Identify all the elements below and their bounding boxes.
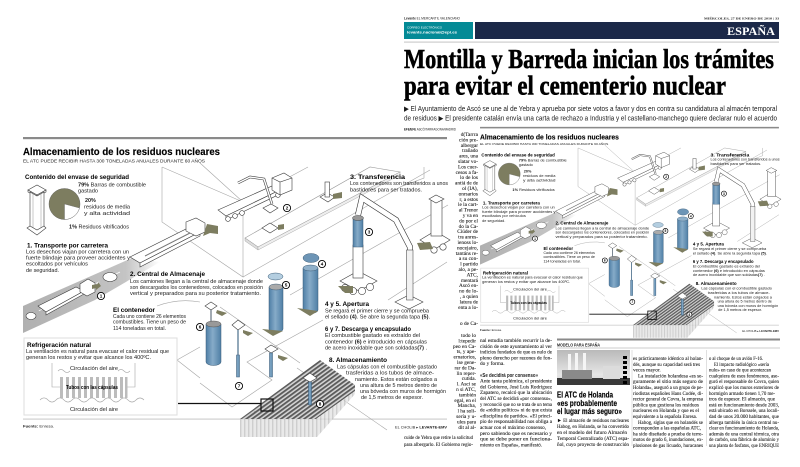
article continuation under left graphic: cuide de Yebra que retire la solicitud [404, 435, 473, 441]
step marker 1 [97, 292, 105, 300]
refrigeration text: Circulación del aire [70, 366, 118, 372]
step 1 text copy: fuerte blindaje para proveer accidentes y [482, 210, 556, 214]
article headline [557, 390, 622, 416]
article continuation under left graphic [404, 435, 473, 448]
markers numbers: 2 [286, 206, 289, 211]
step 6 and 7 text copy [693, 259, 765, 277]
transfer column with blue container [338, 216, 377, 295]
second copy of the infographic drawing, reduced [480, 127, 781, 338]
article column 4: El impacto radiológico «sería [714, 362, 770, 368]
narrow article column fragments: l:tepedir [458, 338, 476, 344]
article column 4: una planta de fosfatos, que ENRIQUE [709, 442, 779, 449]
contents section: Contenido del envase de seguridad [25, 174, 129, 181]
narrow article column fragments: cesos a fa- [456, 169, 478, 176]
narrow article column fragments: alo, a pe- [458, 267, 478, 273]
step 1 text: fuerte blindaje para proveer accidentes y [26, 256, 130, 262]
step 4 and 5 text [325, 301, 430, 320]
container 6 and capsule rods 7 [196, 302, 288, 390]
step marker 6 [196, 323, 204, 331]
narrow article column fragments: do por el [459, 218, 479, 224]
markers numbers: 6 [199, 325, 202, 330]
markers numbers copy: 4 [690, 214, 692, 218]
refrigeration text copy: generan los restos y evitar que alcance los 400ºC. [482, 280, 570, 284]
step 2 text: 2. Central de Almacenaje [130, 271, 205, 278]
container note [113, 307, 186, 332]
article column 3: guramente el sitio más seguro de [633, 379, 704, 385]
markers numbers copy: 1 [534, 237, 536, 241]
article column 3: equivalente a la española Enresa. [633, 414, 697, 420]
byline: EFE/EFE ASCÓ/TARRAGONA/MADRID [404, 126, 456, 132]
contents section: 20% [85, 198, 96, 204]
narrow article column fragments: ts, y ape- [457, 349, 476, 355]
narrow article column fragments: le la cart- [458, 202, 478, 208]
narrow article column fragments: ernatorios, [453, 355, 476, 361]
article column 4: dad de unos 20.000 habitantes, que [709, 414, 780, 420]
narrow article column fragments: onrsarios [459, 191, 478, 197]
step 8 text copy: namiento. Estos están colgados a [714, 295, 773, 299]
refrigeration text: Refrigeración natural [27, 342, 91, 349]
article column 1: pero sabiendo que es necesario y [480, 431, 552, 437]
narrow article column fragments: ATC, [467, 272, 478, 278]
refrigeration panel [24, 338, 177, 415]
step 3 text copy: Los contenedores son transferidos a unos [711, 158, 780, 162]
narrow article column fragments: Los cuer- [458, 164, 478, 170]
article column 3: La instalación holandesa «es se- [638, 373, 703, 379]
contents section: y alta actividad [84, 211, 130, 217]
narrow article column fragments [453, 131, 479, 431]
step 2 text: vertical y preparados para su posterior tratamiento. [130, 291, 261, 297]
article column 4: está ubicado en Borssele, una locali- [709, 408, 779, 414]
header and footer rules [23, 137, 447, 420]
step 2 text copy [555, 221, 649, 239]
infographic drawing: nuclear waste storage [23, 137, 450, 437]
refrigeration text: Circulación del aire [70, 407, 118, 413]
step 1 text: Los desechos viajan por carretera con un [26, 250, 129, 256]
container note: combustibles. Tiene un peso de [113, 320, 186, 326]
article column 1: que se debe poner en funciona- [480, 436, 552, 443]
narrow article column fragments: Ciúder de [457, 229, 479, 235]
refrigeration text [26, 342, 169, 413]
step 3 text copy [711, 152, 780, 166]
step 8 text copy: Las cápsulas con el combustible gastado [701, 287, 772, 291]
trailer and upper storage platform [130, 167, 400, 267]
step 3 text: 3. Transferencia [350, 174, 405, 181]
markers numbers: 8 [319, 402, 322, 407]
left graphic texts [23, 146, 448, 430]
article column 3: corresponden a las españolas ATC, [633, 426, 701, 432]
contents section copy: gastado [519, 163, 533, 167]
refrigeration text copy: Tubos con las cápsulas [510, 301, 547, 305]
narrow article column fragments: trañado [462, 148, 478, 154]
narrow article column fragments: todo lo [461, 333, 476, 339]
contents section copy: 20% [524, 170, 532, 174]
step 6 and 7 text: de acero inoxidable que son soldadas (7) . [325, 346, 427, 352]
article column 1: pleno derecho por razones de fon- [480, 354, 552, 361]
article column 4: alberga también la única central nu- [709, 420, 779, 426]
narrow article column fragments: ción pre- [459, 137, 478, 143]
step 8 text copy: de 1,5 metros de espesor. [718, 308, 762, 312]
column separators [632, 350, 706, 446]
narrow article column fragments: , a quien [460, 294, 478, 300]
step 2 text copy: 2. Central de Almacenaje [555, 221, 609, 226]
step 4 and 5 text: el sellado (4). Se abre la segunda tapa (5). [325, 314, 430, 320]
open containers 4 and 5 [262, 254, 326, 336]
step marker 8 [316, 400, 324, 408]
contents section: gastado [78, 188, 98, 194]
step 4 and 5 text copy [693, 242, 767, 255]
step 8 text: una bóveda con muros de hormigón [360, 389, 446, 395]
step 3 text [350, 174, 448, 194]
narrow article column fragments: también [459, 392, 476, 398]
step 1 text [26, 242, 130, 274]
article column 1: de «rédito político» ni de que exista [480, 408, 553, 414]
narrow article column fragments: l partido [460, 262, 478, 268]
article column 3: plosiones de gas licuado, huracanes [633, 443, 703, 449]
article column 1: miento en España», manifestó. [480, 441, 542, 448]
narrow article column fragments: a su con- [459, 256, 478, 262]
narrow article column fragments: do la Ca- [459, 224, 478, 230]
article column 1: «disciplina de partido». «El princi- [480, 413, 552, 419]
column on wheeled base at far right [417, 195, 450, 253]
article column 4: cualquiera de esos fenómenos, ase- [709, 372, 779, 379]
step 1 text copy: escoltados por vehículos [482, 214, 526, 218]
teal email box [404, 22, 473, 39]
article column 3: motos de grado 6, inundaciones, ex- [633, 437, 703, 443]
refrigeration text copy: Circulación del aire [513, 288, 547, 292]
article headline: «es probablemente [557, 399, 617, 408]
container note copy: Cada uno contiene 26 elementos [543, 251, 595, 255]
narrow article column fragments: l ha soli- [457, 409, 476, 415]
contents section copy [481, 152, 567, 192]
contents section: 79% Barras de combustible [78, 182, 146, 188]
step 2 text [130, 271, 263, 297]
narrow article column fragments: Mancha, [458, 403, 476, 409]
car ahead [103, 272, 117, 282]
markers numbers copy: 7 [631, 300, 633, 304]
step 4 and 5 text: 4 y 5. Apertura [325, 301, 369, 308]
graphic title: Almacenamiento de los residuos nucleares [23, 146, 220, 158]
article column 1: del Gobierno, José Luis Rodríguez [480, 384, 553, 390]
step 2 text copy: Los camiones llegan a la central de almacenaje donde [555, 227, 649, 230]
email label: CORREO ELECTRÓNICO [407, 24, 443, 30]
article column 1: pio de responsabilidad nos obliga a [480, 419, 553, 425]
step 1 text: escoltados por vehículos [26, 262, 88, 268]
narrow article column fragments: d(Tarrra [461, 131, 479, 138]
column on small base [320, 182, 342, 202]
article column 1: Zapatero, recalcó que la ubicación [480, 390, 552, 396]
narrow article column fragments: n si ATC, [456, 387, 476, 393]
article column 3: riodistas españoles Hans Codée, di- [633, 391, 703, 397]
graphic subtitle copy: EL ATC PUEDE RECIBIR HASTA 300 TONELADAS ANUALES DURANTE 60 AÑOS [480, 141, 608, 146]
article column 3: es prácticamente idéntico al holan- [633, 356, 703, 362]
article column 1: Ante tanta polémica, el presidente [480, 379, 553, 385]
narrow article column fragments: Ascó en- [459, 283, 478, 289]
narrow article column fragments: antiá de de [455, 181, 479, 187]
article headline: el lugar más seguro» [557, 407, 622, 416]
step marker 7 [235, 382, 243, 390]
step 6 and 7 text [325, 326, 427, 352]
step 8 text copy: una bóveda con muros de hormigón [718, 304, 778, 308]
step 4 and 5 text: Se regará el primer cierre y se comprueba [325, 308, 429, 314]
step 8 text copy: trasferidas a los tubos de almace- [708, 291, 771, 295]
refrigeration text: generan los restos y evitar que alcance los 400ºC. [26, 355, 151, 361]
narrow article column fragments: enta a lo- [458, 305, 478, 311]
email address: levante.nacional@epi.es [407, 30, 458, 34]
narrow article column fragments: lin reper- [457, 371, 476, 377]
step 6 and 7 text: contenedor (6) e introducido en cápsulas [325, 340, 427, 346]
refrigeration text: La ventilación es natural para evacuar el calor residual que [26, 349, 169, 355]
container note copy: combustibles. Tiene un peso de [543, 255, 595, 259]
step 2 text: son descargados los contenedores, colocados en posición [130, 285, 263, 291]
contents section copy: 1% Residuos vitrificados [512, 188, 555, 192]
article column 1: del ATC se decidirá «por consenso», [480, 396, 552, 402]
markers numbers copy: 3 [723, 192, 725, 196]
article column 4: de carbón, una fábrica de aluminio y [709, 436, 779, 443]
contents section copy: residuos de media [523, 174, 556, 178]
markers numbers: 3 [368, 230, 371, 235]
narrow article column fragments: dit al al- [458, 425, 476, 431]
container note copy: 114 toneladas en total. [543, 260, 581, 264]
step 8 text copy: una altura de 5 metros dentro de [718, 300, 772, 304]
step 8 text copy [696, 281, 778, 312]
contents section copy: 79% Barras de combustible [519, 159, 567, 163]
step 8 text: una altura de 5 metros dentro de [360, 383, 437, 389]
markers numbers: 7 [238, 384, 241, 389]
photo of nuclear site [557, 350, 630, 385]
article column 1: «Se decidirá por consenso» [480, 373, 538, 379]
container note copy [543, 246, 595, 264]
step 3 text: bastidores para ser tratados. [350, 188, 422, 194]
narrow article column fragments: ienoss lo- [458, 240, 478, 246]
article column 3: pública que gestiona los residuos [633, 402, 699, 408]
container note copy: El contenedor [543, 246, 573, 251]
contents section copy: y alta actividad [523, 179, 555, 183]
markers numbers copy: 2 [665, 175, 667, 179]
crane and carrier in central storage [218, 173, 292, 233]
source: Fuente: Enresa. [23, 424, 54, 428]
step 1 text copy: Los desechos viajan por carretera con un [482, 206, 555, 210]
article column 4: o al choque de un avión F-16. [709, 356, 763, 362]
pie chart [49, 188, 80, 220]
article column 4: nulo» en caso de que acontezcan [709, 368, 771, 374]
container note: El contenedor [113, 307, 155, 314]
contents section copy: Contenido del envase de seguridad [481, 152, 555, 157]
main headline: para evitar el cementerio nuclear [404, 70, 726, 100]
step 1 text copy: 1. Transporte por carretera [483, 201, 540, 206]
narrow article column fragments: rar de Da- [455, 365, 476, 371]
article column 2 [557, 418, 629, 448]
step 8 text: 8. Almacenamiento [329, 357, 387, 364]
narrow article column fragments: egal, en el [454, 398, 477, 404]
markers numbers copy: 6 [604, 259, 606, 263]
article column 2: en el modelo del futuro Almacén [557, 429, 627, 436]
article column 4: clear en funcionamiento de Holanda, [709, 425, 779, 432]
narrow article column fragments: r, a estos [460, 197, 478, 203]
markers numbers copy: 8 [689, 313, 691, 317]
step 6 and 7 text copy: El combustible gastado es extraído del [693, 264, 760, 268]
narrow article column fragments: tantáns re- [456, 251, 478, 257]
step 3 text: Los contenedores son transferidos a unos [350, 181, 448, 187]
container note: Cada uno contiene 26 elementos [113, 314, 186, 320]
article column 3: nucleares en Holanda y que es el [633, 408, 699, 414]
article headline: El ATC de Holanda [557, 390, 613, 400]
article column 4: hormigón armado tienen 1,70 me- [709, 391, 775, 397]
markers numbers copy: 5 [665, 229, 667, 233]
truck on road [26, 272, 117, 320]
step 4 and 5 text copy: Se regará el primer cierre y se comprueba [693, 247, 767, 251]
narrow article column fragments: no de lo- [459, 289, 478, 295]
step 8 text: Las cápsulas con el combustible gastado [337, 364, 437, 370]
article column 3: Holanda», aseguró a un grupo de pe- [633, 385, 703, 391]
modelo section rules [557, 338, 780, 348]
markers numbers: 1 [100, 294, 103, 299]
article column 2: Habog, en Holanda, se ha convertido [557, 424, 629, 430]
contents section [25, 174, 146, 230]
step 2 text copy: vertical y preparados para su posterior tratamiento. [555, 235, 648, 239]
narrow article column fragments: tra anres- [458, 235, 478, 241]
article column 3: veces mayor. [633, 368, 661, 374]
article column 3: rector general de Covra, la empresa [633, 397, 704, 403]
article column 2: Temporal Centralizado (ATC) espa- [557, 435, 629, 442]
article column 1: cisión de este ayuntamiento al ver [480, 344, 552, 350]
article column 1: actuar con el máximo consenso, [480, 425, 546, 431]
refrigeration text copy [482, 270, 583, 320]
narrow article column fragments: albergar [461, 143, 478, 149]
narrow article column fragments: ares, una [459, 154, 479, 160]
step 8 text copy: 8. Almacenamiento [696, 281, 737, 286]
building outline lines [157, 163, 448, 430]
step 3 text copy: bastidores para ser tratados. [711, 162, 761, 166]
source copy: Fuente: Enresa. [480, 328, 502, 332]
narrow article column fragments: latura de [460, 299, 479, 305]
page header [404, 16, 779, 43]
step 6 and 7 text copy: contenedor (6) e introducido en cápsulas [693, 269, 765, 273]
article column 1 [480, 338, 553, 448]
credit copy: EL CHOLIB ▸ LEVANTE-EMV [742, 330, 779, 333]
refrigeration text copy: La ventilación es natural para evacuar el calor residual que [482, 276, 583, 280]
refrigeration text copy: Circulación del aire [513, 316, 547, 320]
step 3 text copy: 3. Transferencia [711, 152, 750, 157]
callout box and leader line [178, 399, 273, 411]
refrigeration text: Tubos con las cápsulas [66, 385, 118, 391]
article column 2: ñol, cuyo proyecto de construcción [557, 442, 629, 448]
step marker 2 [283, 204, 291, 212]
narrow article column fragments: o de Ca- [460, 321, 478, 327]
step 1 text copy [482, 201, 556, 223]
article column 4: explicó que los muros exteriores de [709, 385, 780, 391]
markers numbers: 4 [321, 262, 324, 267]
markers numbers: 5 [285, 283, 288, 288]
narrow article column fragments: l. Asci se [457, 382, 477, 388]
road [23, 258, 160, 333]
container note: 114 toneladas en total. [113, 326, 166, 332]
credit: EL CHOLIB ▸ LEVANTE-EMV [395, 426, 448, 430]
article column 4: además de una central térmica, otra [709, 431, 780, 437]
narrow article column fragments: al Trenor [459, 208, 478, 214]
step 8 text [329, 357, 446, 401]
navy section bar [475, 22, 779, 39]
narrow article column fragments: slatar vo- [458, 159, 478, 165]
article column 3: dés, aunque su capacidad será tres [633, 362, 700, 368]
refrigeration text copy: Refrigeración natural [483, 270, 528, 275]
narrow article column fragments: lo de los [460, 175, 478, 181]
date and page number: MIÉRCOLES, 27 DE ENERO DE 2010 | 33 [704, 16, 779, 20]
step 1 text: de seguridad. [26, 268, 59, 274]
step 6 and 7 text copy: de acero inoxidable que son soldadas(7) . [693, 273, 765, 277]
article column 4: guró el responsable de Covra, quien [709, 379, 779, 385]
article column 1: indicios fundados de que es nulo de [480, 349, 553, 356]
step marker 3 [365, 228, 373, 236]
subheading [404, 106, 777, 122]
newspaper name line: Levante EL MERCANTIL VALENCIANO [404, 16, 460, 20]
gantry arm [358, 198, 423, 309]
step 4 and 5 text copy: 4 y 5. Apertura [693, 242, 724, 247]
article continuation under left graphic: para albergarlo. El Gobierno regio- [404, 442, 473, 448]
step 6 and 7 text copy: 6 y 7. Descarga y encapsulado [693, 259, 754, 264]
article column 1: y reconoció que no se trata de un tema [480, 402, 553, 408]
step marker 5 [282, 281, 290, 289]
narrow article column fragments: nocejairo, [457, 245, 478, 251]
article column 4: tros de espesor. El almacén, que [709, 397, 776, 403]
graphic subtitle: EL ATC PUEDE RECIBIR HASTA 300 TONELADAS ANUALES DURANTE 60 AÑOS [23, 158, 205, 164]
markers numbers copy [534, 175, 725, 317]
narrow article column fragments: mentará [461, 278, 479, 284]
narrow article column fragments: ules para [457, 419, 477, 425]
contents column icon [27, 185, 46, 235]
article column 4 [709, 356, 780, 449]
right graphic texts [480, 133, 780, 333]
article column 1: nal estudia también recurrir la de- [480, 338, 552, 344]
step 8 text: trasferidas a los tubos de almace- [346, 370, 434, 376]
article column 3 [633, 356, 704, 449]
article column 4: está en funcionamiento desde 2003, [709, 401, 779, 408]
article column 3: ha sido diseñado a prueba de terre- [633, 431, 703, 437]
step 6 and 7 text: El combustible gastado es extraído del [325, 333, 420, 339]
car behind [26, 312, 36, 320]
section name: ESPAÑA [727, 24, 776, 38]
contents section: residuos de media [84, 204, 130, 210]
section tag: MODELO PARA ESPAÑA [557, 342, 601, 348]
narrow article column fragments: lse gene- [457, 360, 476, 366]
step 2 text: Los camiones llegan a la central de almacenaje donde [130, 279, 263, 285]
graphic title copy: Almacenamiento de los residuos nucleares [480, 133, 619, 142]
step marker 4 [318, 260, 326, 268]
article column 1: do y forma. [480, 360, 505, 367]
contents section: 1% Residuos vitrificados [69, 224, 129, 230]
markers numbers [100, 206, 371, 407]
narrow article column fragments: cutida. [462, 376, 476, 382]
step 2 text copy: son descargados los contenedores, colocados en posición [555, 231, 649, 235]
article column 2: ► El almacén de residuos nucleares [557, 418, 629, 424]
step 8 text: namiento. Estos están colgados a [355, 377, 437, 383]
storage tube field [240, 360, 355, 437]
step 1 text copy: de seguridad. [482, 219, 505, 223]
step 8 text: de 1,5 metros de espesor. [361, 395, 423, 401]
step 6 and 7 text: 6 y 7. Descarga y encapsulado [325, 326, 411, 333]
step 4 and 5 text copy: el sellado (4). Se abre la segunda tapa (5). [693, 251, 767, 255]
narrow article column fragments: peo en Ca- [453, 344, 476, 350]
step 1 text: 1. Transporte por carretera [27, 242, 108, 250]
article column 3: Habog, siglas que en holandés se [638, 420, 704, 426]
narrow article column fragments: ol (IA), [462, 185, 478, 192]
main headline [404, 43, 774, 100]
narrow article column fragments: sería y u- [456, 414, 476, 420]
narrow article column fragments: y va en [463, 213, 478, 219]
